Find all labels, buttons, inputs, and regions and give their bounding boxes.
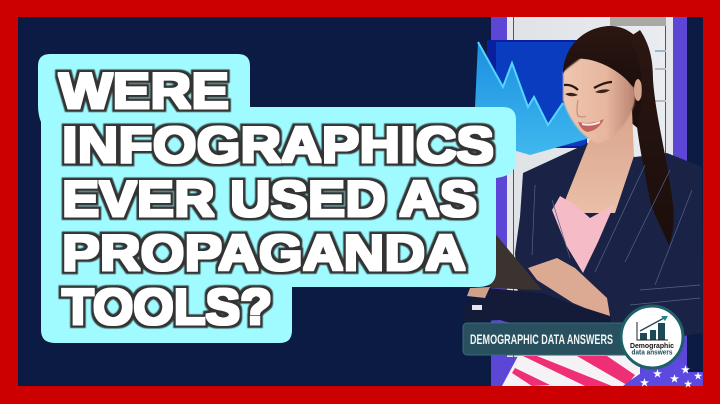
sleeve <box>463 288 612 326</box>
smile <box>578 119 604 132</box>
woman figure <box>463 26 703 345</box>
logo badge <box>621 306 683 368</box>
eyebrows <box>564 82 612 90</box>
headline glow backing <box>38 54 516 343</box>
flag stripes <box>502 356 640 386</box>
nose shadow <box>577 100 586 117</box>
hair mass behind head <box>563 26 653 130</box>
flag stars <box>623 358 703 389</box>
headline: TOOLS? <box>62 279 272 335</box>
hand <box>528 258 610 316</box>
pink top <box>552 196 614 273</box>
headline: EVER USED AS <box>62 171 477 227</box>
background office panel <box>491 17 687 386</box>
headline: WERE <box>59 63 229 119</box>
pinstripe lapel lines <box>532 165 700 305</box>
chart screen with jagged line <box>475 40 590 155</box>
hair parting over forehead <box>563 26 643 90</box>
ear <box>634 79 642 101</box>
logo badge: data answers <box>632 350 673 356</box>
neck and chest <box>560 110 634 213</box>
face <box>563 55 635 143</box>
banner: channel name <box>463 323 633 355</box>
headline: INFOGRAPHICS <box>62 117 494 173</box>
shirt cuff <box>472 305 482 310</box>
headline <box>59 63 494 335</box>
tablet <box>475 225 542 290</box>
ponytail <box>628 30 674 245</box>
suit jacket <box>515 143 703 345</box>
flag stars: ★ <box>681 365 690 376</box>
eyes <box>565 89 610 96</box>
flag stars: ★ <box>653 369 662 380</box>
flag stars: ★ <box>670 374 679 385</box>
cuff hand <box>467 287 490 298</box>
logo badge: Demographic <box>630 341 674 350</box>
flag stars: ★ <box>694 371 703 381</box>
headline: PROPAGANDA <box>62 225 466 281</box>
banner: channel name: DEMOGRAPHIC DATA ANSWERS <box>470 331 613 347</box>
flag stars: ★ <box>684 379 693 389</box>
flag stars: ★ <box>640 378 649 389</box>
